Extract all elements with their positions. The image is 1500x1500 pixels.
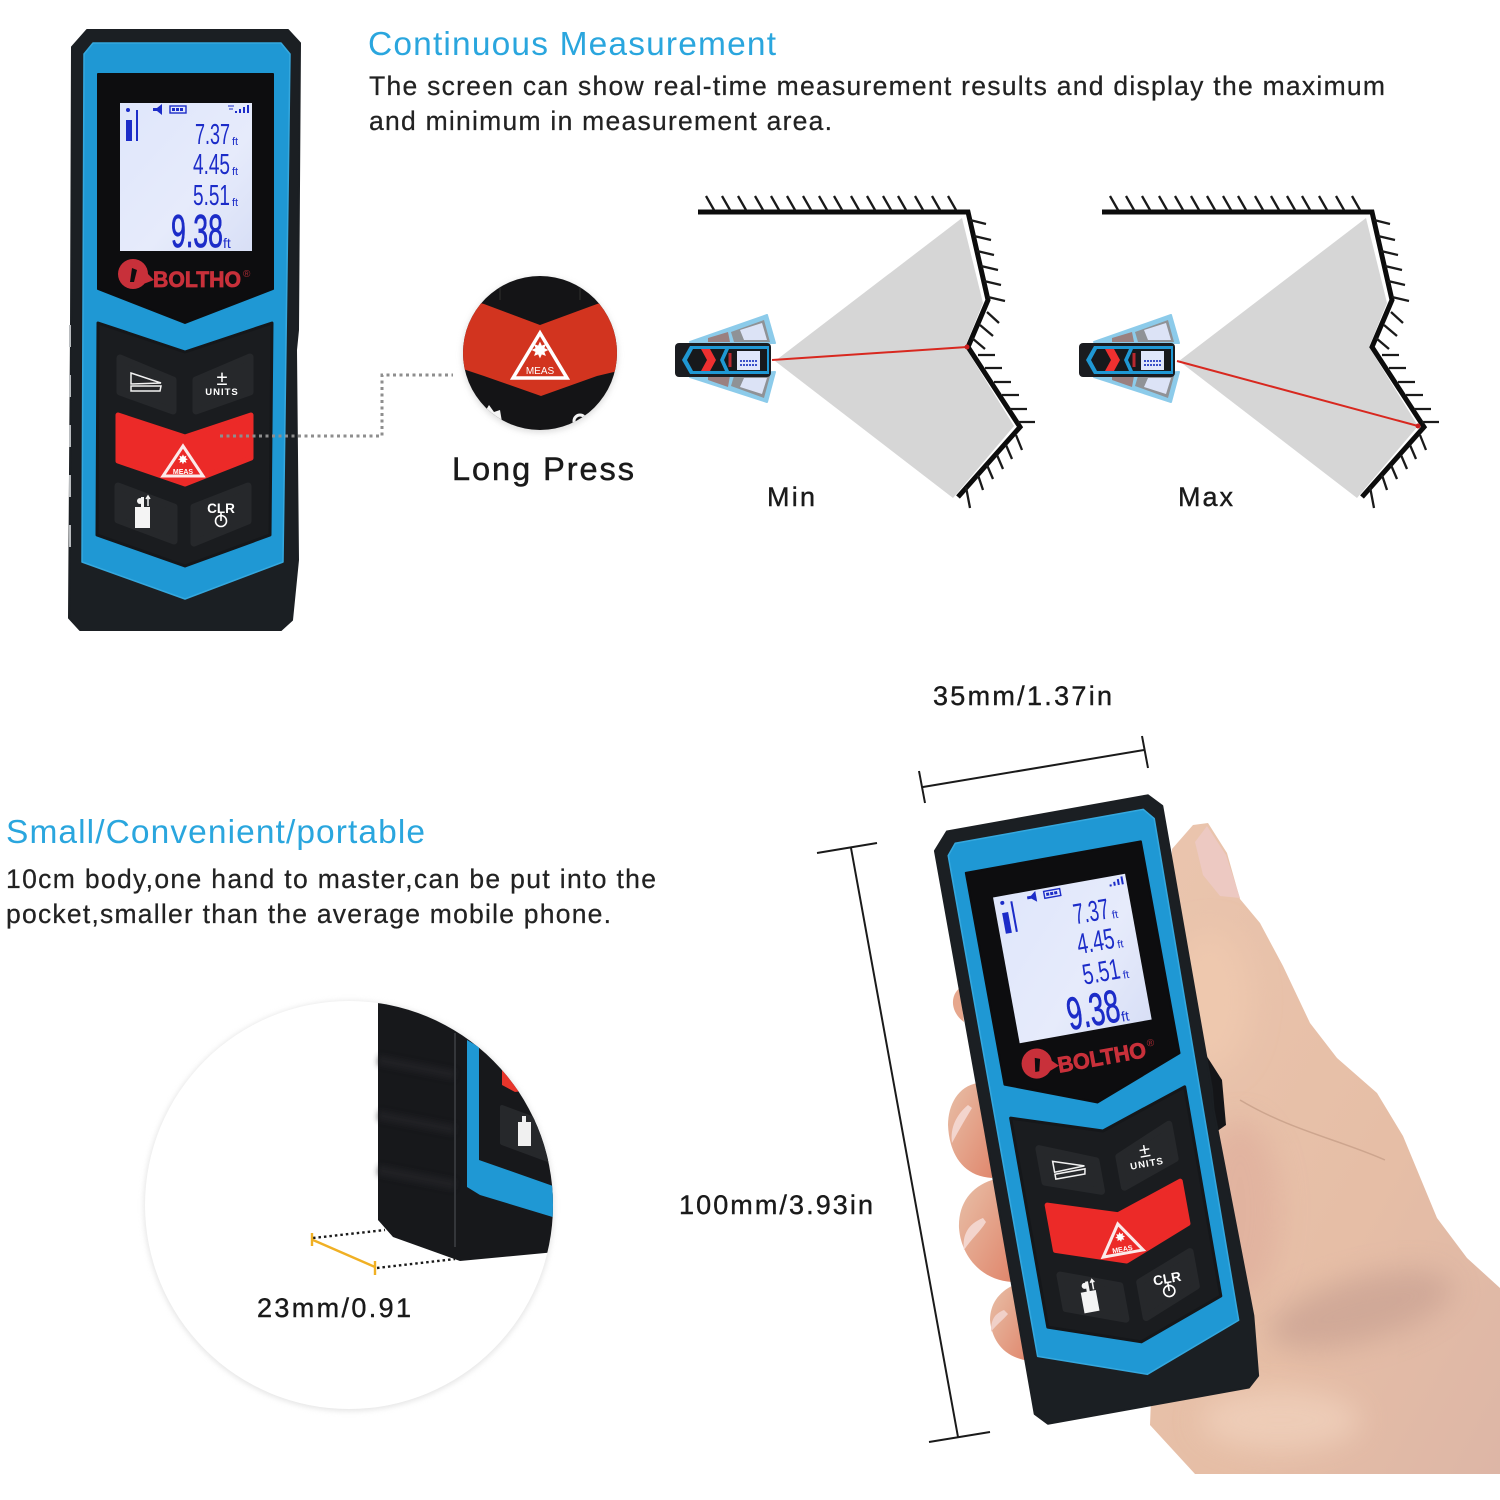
lcd screen: ft [1120,1008,1131,1025]
label: max: Max [1178,482,1234,512]
red measure button: MEAS [173,469,193,476]
button: units [196,357,250,411]
lcd screen: 5.51 [193,180,230,212]
lcd screen: ft [232,136,238,148]
screen surround [98,74,273,323]
red measure button [118,415,251,484]
dimension: width [919,681,1148,803]
description: continuous measurement: The screen can show real-time measurement results and display the maximum [369,71,1385,101]
thumbnail [1195,826,1240,898]
lcd screen: ft [1116,938,1125,951]
lcd screen: 7.37 [1071,894,1112,931]
palm and thumb [1150,823,1500,1474]
lcd screen: ft [1111,909,1119,922]
index finger [948,1080,995,1178]
callout: long press button close-up [460,276,622,433]
finger tip [953,988,964,1022]
button: units: ± [217,368,228,390]
dimension label: 23mm/0.91 [257,1293,411,1323]
brand logo [1019,1028,1158,1084]
red key [502,1070,518,1092]
blue frame [944,808,1252,1393]
laser line [772,347,967,360]
button: mode [1060,1265,1126,1329]
button: area [120,358,173,411]
callout: device thickness close-up [144,1000,556,1411]
lcd screen: ft [232,197,238,209]
mini device with sweep [675,315,775,402]
button: units: UNITS [1129,1156,1165,1173]
heading: small convenient portable: Small/Convenient/portable [6,814,425,851]
callout: long press button close-up: ✸ [531,338,549,363]
brand logo: ® [243,269,251,280]
ring finger [990,1283,1030,1361]
wall outline [1102,212,1424,497]
device body [929,793,1268,1426]
diagram: maximum measurement [1079,196,1439,508]
button: mode [118,486,174,541]
device side [378,1000,556,1261]
description: portability: pocket,smaller than the average mobile phone. [6,899,611,929]
brand logo: BOLTHO [1056,1037,1148,1078]
blue frame [82,43,290,599]
dimension: height [679,843,990,1442]
wall hatching [1110,196,1439,508]
lcd screen: 9.38 [1062,980,1124,1040]
callout: long press button close-up: MEAS [526,366,554,377]
heading: continuous measurement: Continuous Measurement [368,26,777,63]
lcd screen [993,874,1153,1049]
device body [69,30,300,630]
key with icon [502,1107,556,1163]
button: clear and power [1136,1252,1200,1318]
red measure button: MEAS [1112,1245,1134,1255]
dotted connector from button to callout [220,375,453,436]
wall outline [698,212,1020,497]
blue frame edge [467,1040,556,1218]
dimension: height: 100mm/3.93in [679,1190,873,1220]
lcd screen: 7.37 [195,119,230,151]
diagram: minimum measurement [675,196,1035,508]
lcd screen: ft [223,235,231,251]
hand holding device [948,823,1500,1474]
description: continuous measurement: and minimum in measurement area. [369,106,832,136]
label: long press: Long Press [452,451,634,487]
mini device with sweep [1079,315,1179,402]
grip shadow [1206,1055,1226,1132]
red measure button [1047,1181,1193,1273]
description: continuous measurement [369,71,1385,136]
button: units: UNITS [205,387,239,398]
dimension: width: 35mm/1.37in [933,681,1112,711]
screen surround [966,841,1186,1118]
label: min: Min [767,482,815,512]
scan area [1179,218,1418,498]
lcd screen: 9.38 [171,205,223,257]
brand logo: BOLTHO [153,267,241,292]
button: units: ± [1137,1139,1152,1163]
lcd screen: ft [232,166,238,178]
button: units [1115,1124,1178,1187]
description: portability: 10cm body,one hand to master,can be put into the [6,864,656,894]
description: portability [6,864,656,929]
device: held in hand [929,793,1268,1426]
red measure button: ✸ [1113,1229,1127,1246]
red measure button: ✸ [178,452,189,467]
lcd screen: 4.45 [193,149,230,181]
middle finger [959,1178,1012,1282]
lcd screen: 5.51 [1080,954,1123,992]
lcd screen [120,103,252,257]
dimension marker [312,1230,455,1275]
laser line [1177,361,1418,426]
device: front view of laser meter [69,30,300,630]
button: clear and power: CLR [207,501,235,516]
keypad panel [1010,1087,1228,1358]
brand logo: ® [1146,1037,1156,1050]
lcd screen: ft [1122,969,1130,982]
side grip notches [69,325,71,547]
button: clear and power: CLR [1152,1269,1182,1289]
lcd screen: 4.45 [1074,923,1117,961]
wall hatching [706,196,1035,508]
scan area [775,218,1014,498]
keypad panel [97,323,272,566]
button: area [1039,1139,1101,1201]
brand logo [118,259,251,292]
button: clear and power [194,486,248,543]
